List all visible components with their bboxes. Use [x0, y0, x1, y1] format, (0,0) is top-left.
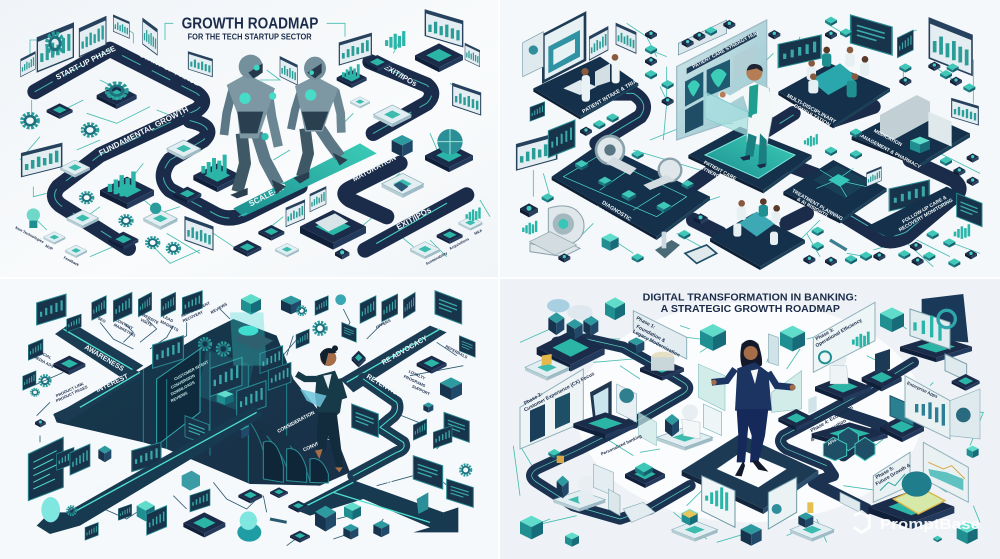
label: recovery monitoring: RECOVERY MONITORING: [898, 197, 954, 233]
label: patient intake: PATIENT INTAKE & TRIAGE: [581, 75, 645, 115]
phase labels: Enterprise Apps: [906, 380, 939, 399]
desk and staff: [563, 80, 597, 95]
small labels: WEBSITE: [141, 312, 160, 325]
connector lines: [533, 23, 980, 267]
small labels: [33, 300, 469, 403]
road label: fundamental growth: FUNDAMENTAL GROWTH: [97, 105, 190, 158]
central funnel structure: [53, 294, 350, 486]
phase labels: Foundation &: [635, 324, 667, 344]
dashboards and tiles: [520, 294, 980, 547]
small labels: LEAD: [162, 314, 174, 323]
label: conversion: CONVERSION: [302, 434, 336, 453]
phase labels: Legacy Modernization: [632, 329, 681, 359]
label: synergy hub second line: SYNERGY HUB: [699, 165, 734, 187]
road: scale-up: [163, 121, 377, 218]
title line two: A STRATEGIC GROWTH ROADMAP: [661, 304, 840, 315]
arrow band: advocacy: [293, 475, 458, 532]
small labels: VISITS: [140, 317, 153, 328]
subtitle: for the tech startup sector: FOR THE TECH STARTUP SECTOR: [188, 32, 312, 42]
road label: start-up phase: START-UP PHASE: [54, 44, 117, 82]
robot: right figure: [291, 57, 346, 182]
small labels: [15, 226, 483, 268]
screens: [21, 10, 481, 250]
phase labels: Phase 5:: [875, 465, 896, 481]
central frame platform: [682, 434, 818, 509]
glass panel: patient care synergy hub: [677, 20, 767, 140]
label: multi-disciplinary: MULTI-DISCIPLINARY: [786, 93, 837, 125]
title line one: DIGITAL TRANSFORMATION IN BANKING:: [643, 292, 857, 303]
road: start-up and fundamental growth: [35, 44, 202, 248]
phase labels: Future Growth &: [875, 462, 912, 487]
small labels: REFERRALS: [445, 344, 469, 360]
robot: left figure: [224, 55, 284, 197]
arrow band: interest: [53, 369, 143, 422]
funnel text: CUSTOMER INTENT: [173, 359, 210, 382]
label: consideration: CONSIDERATION: [276, 410, 316, 435]
label: consultation: CONSULTATION: [792, 103, 831, 128]
title: growth roadmap: GROWTH ROADMAP: [182, 16, 319, 33]
icon tiles: [22, 55, 482, 260]
small labels: ABANDONMENT: [180, 300, 211, 318]
businesswoman: [711, 340, 796, 476]
funnel staircase slabs: [263, 441, 328, 483]
funnel text: DOWNLOADS: [170, 380, 196, 397]
phase labels: Operational Efficiency: [815, 317, 863, 349]
connector lines: [513, 312, 983, 542]
small labels: MEDIA ADS: [33, 354, 55, 369]
label: management and pharmacy: MANAGEMENT & PHARMACY: [856, 131, 922, 171]
arrow band: interest: INTEREST: [95, 373, 130, 394]
phase labels: Phase 2:: [523, 391, 544, 407]
road label: maturation: MATURATION: [351, 153, 397, 183]
watermark: PromptBase logo: PromptBase: [880, 517, 980, 533]
phase labels: Customer Experience (CX) Focus: [523, 371, 596, 413]
watermark: PromptBase logo: [854, 512, 980, 533]
road label: exit/IPOs bottom: EXIT/IPOs: [395, 205, 433, 232]
road: maturation: [345, 153, 400, 217]
arrow band: awareness top: [55, 322, 143, 379]
small labels: CONTENT: [115, 317, 134, 331]
platform: diagnostic imaging and labs: [552, 136, 710, 240]
small labels: New Technologies: [15, 226, 45, 244]
arrow band: advocacy: ADVOCACY: [376, 475, 415, 500]
funnel text: CONVERSION: [170, 373, 196, 390]
small labels: REVIEWS: [210, 301, 228, 315]
phase labels: Phase 4: Ecosystem: [810, 404, 855, 434]
businesswoman: [297, 345, 343, 472]
small labels: PRODUCT LINK: [55, 381, 84, 398]
small labels: MAGNETS: [160, 319, 180, 333]
phase labels: [523, 315, 939, 487]
road label: start-up phase second: START-UP PHASE: [138, 50, 201, 88]
label: diagnostic imaging: DIAGNOSTIC: [601, 200, 632, 223]
phase labels: APIs: [826, 437, 838, 447]
funnel text: REVIEWS: [170, 390, 189, 403]
phase labels: Phase 3:: [815, 327, 836, 342]
phase labels: & API Integration: [810, 418, 848, 443]
panel: patient care synergy hub: [500, 0, 1000, 279]
arrow band: re-advocacy and retention: [340, 326, 447, 476]
platform: team meeting: [710, 198, 805, 270]
platform: treatment planning and AI insights: [783, 160, 887, 223]
panel: marketing funnel customer journey: [0, 279, 500, 559]
arrow band: awareness bottom: AWARENESS: [83, 469, 130, 501]
funnel screens: [153, 336, 183, 368]
small labels: Acquisitions: [449, 237, 470, 251]
platform: medication management and pharmacy: [852, 95, 970, 171]
label: medication: MEDICATION: [872, 128, 903, 148]
small labels: SUPPORT: [411, 384, 431, 397]
label: follow-up care: FOLLOW-UP CARE &: [901, 194, 948, 225]
road: banking roadmap: [532, 339, 913, 519]
road links: [597, 93, 959, 241]
panel: tech startup growth roadmap: [0, 0, 499, 278]
arrow band: awareness top: AWARENESS: [83, 344, 125, 373]
connector lines: [33, 309, 463, 546]
platform: patient intake and triage: [523, 13, 645, 119]
road: exit IPOs upper: [370, 62, 432, 133]
arrow band: awareness bottom: [37, 406, 263, 534]
panel: digital transformation in banking: [500, 279, 1000, 559]
glass panel: patient care synergy hub: PATIENT CARE SYNERGY HUB: [691, 30, 760, 70]
small labels: PROGRAMS: [403, 374, 427, 388]
phase labels: Phase 1:: [635, 315, 656, 331]
arrow band: re-advocacy and retention: RE ADVOCACY: [381, 335, 429, 367]
small labels: MVP: [45, 244, 54, 252]
small labels: PRODUCT PAGES: [55, 384, 89, 403]
follow-up care panel: [867, 180, 965, 238]
icons around funnel: [23, 291, 475, 543]
small labels: SOCIAL: [37, 349, 53, 361]
small labels: RECOVERY: [182, 309, 204, 323]
doctor: [720, 64, 773, 168]
small labels: Feedback: [63, 256, 80, 268]
road label: exit/IPOs top: EXIT/IPOs: [382, 62, 419, 88]
connector lines: [20, 20, 490, 263]
arrow band: re-advocacy and retention: RETENTION: [365, 373, 403, 400]
label: treatment planning: TREATMENT PLANNING: [791, 188, 844, 222]
platform: multi-disciplinary consultation: [778, 47, 890, 128]
phase labels: Personalized banking: [600, 433, 643, 457]
small labels: Sustainability: [425, 251, 449, 266]
side screens and nodes: [517, 15, 982, 268]
small labels: SEO: [97, 315, 107, 324]
lightbulb icon: [41, 497, 60, 522]
small labels: MARKETING: [113, 322, 137, 338]
small labels: LOYALTY: [408, 369, 427, 381]
platform: patient care synergy hub: [688, 127, 812, 193]
road label: scale-up: SCALE-UP: [247, 182, 289, 208]
road: exit IPOs lower: [365, 195, 467, 250]
funnel text: [170, 359, 210, 403]
small labels: M&A: [474, 228, 483, 236]
small labels: OFFERS: [375, 318, 392, 330]
monitor: [543, 13, 585, 82]
label: imaging and labs: IMAGING & LABS: [594, 205, 635, 234]
label: synergy hub: PATIENT CARE: [702, 160, 738, 182]
label: AI insights: & AI INSIGHTS: [796, 197, 829, 219]
